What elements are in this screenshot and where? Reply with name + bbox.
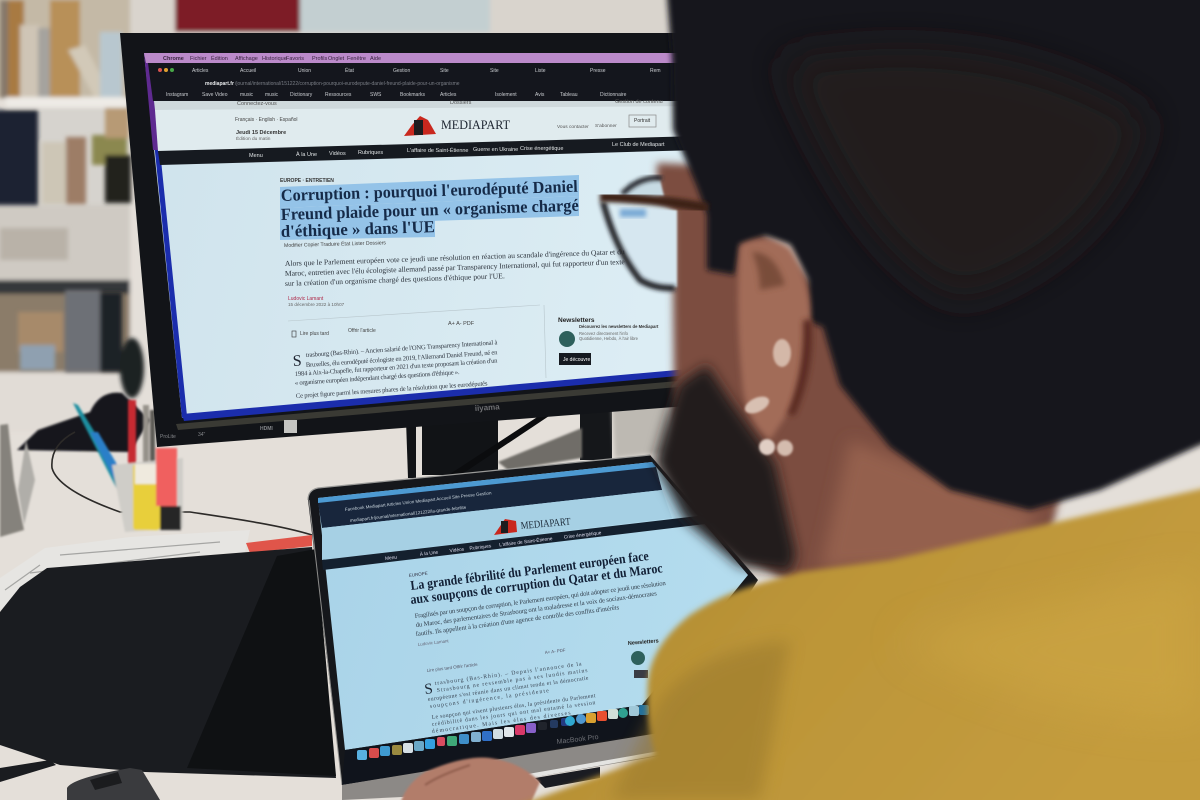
newsletters box <box>544 305 659 378</box>
device on desk <box>67 768 160 800</box>
monitor: Menu <box>249 153 263 159</box>
monitor stand <box>406 400 668 478</box>
beard <box>655 365 796 572</box>
monitor: Le Club de Mediapart <box>612 142 665 148</box>
monitor: Affichage <box>235 56 258 62</box>
site header: Jeudi 15 Décembre <box>236 130 286 136</box>
laptop body: S <box>424 681 434 698</box>
laptop headline: EUROPE <box>409 571 428 578</box>
monitor: Tableau <box>560 92 578 98</box>
monitor: SWS <box>370 92 382 98</box>
monitor foot labels: 34" <box>198 432 206 438</box>
article body: « organisme européen indépendant chargé des questions d'éthique ». <box>295 369 460 387</box>
monitor: Isolement <box>495 92 517 98</box>
laptop: Facebook Mediapart Articles Union Mediapart Accueil Site Presse Gestion <box>345 490 492 512</box>
monitor: music <box>265 92 279 98</box>
monitor: Gestion <box>393 68 410 74</box>
site top strip <box>154 101 700 110</box>
laptop base <box>342 732 665 800</box>
monitor: Chrome <box>163 56 184 62</box>
laptop body: Ludovic Lamant <box>418 638 450 647</box>
laptop logo <box>494 517 572 535</box>
ear <box>738 239 810 440</box>
article body: Bruxelles, élu eurodéputé écologiste en 2019, l'Allemand Daniel Freund, né en <box>306 349 498 369</box>
papers <box>0 530 250 610</box>
laptop lead: Fragilisés par un soupçon de corruption, le Parlement européen, qui doit adopter ce jeudi une résolution <box>414 580 667 620</box>
bookshelf and blurred objects <box>0 0 144 398</box>
byline and tools: A+ A- PDF <box>448 321 475 327</box>
article body <box>292 339 498 400</box>
monitor: Accueil <box>240 68 256 74</box>
monitor: Liste <box>535 68 546 74</box>
monitor: Guerre en Ukraine <box>473 147 518 153</box>
site header: Portrait <box>634 118 651 124</box>
site header: S'abonner <box>595 123 617 129</box>
article heading: Corruption : pourquoi l'eurodéputé Daniel <box>281 177 578 205</box>
laptop body: trasbourg (Bas-Rhin). – Depuis l'annonce de la <box>434 660 582 687</box>
laptop lower bezel with dock <box>342 705 665 785</box>
site header: Français · English · Español <box>235 117 298 123</box>
hair <box>665 0 1200 510</box>
monitor: Site <box>490 68 499 74</box>
pen cup <box>73 400 183 532</box>
Mediapart logo: MEDIAPART <box>441 117 510 132</box>
monitor: Articles <box>192 68 209 74</box>
byline and tools: Offrir l'article <box>348 328 376 334</box>
sweater <box>480 480 1200 800</box>
monitor <box>120 33 700 478</box>
monitor screen <box>144 53 700 418</box>
laptop screen <box>318 462 748 750</box>
monitor: Aide <box>370 56 381 62</box>
laptop browser bar <box>318 463 662 528</box>
article body: trasbourg (Bas-Rhin). – Ancien salarié de l'ONG Transparency International à <box>306 339 498 359</box>
article heading: Modifier Copier Traduire État Lister Dossiers <box>284 239 386 249</box>
monitor: Ressources <box>325 92 352 98</box>
newsletters box: Newsletters <box>558 317 595 324</box>
glasses <box>600 178 708 288</box>
laptop body: soupçons d'ingérence, la présidente <box>429 688 550 710</box>
site header <box>155 106 700 151</box>
neck and face skin <box>657 163 1060 590</box>
Mediapart logo <box>404 116 510 136</box>
article heading: Freund plaide pour un « organisme chargé <box>281 196 579 224</box>
monitor: Presse <box>590 68 606 74</box>
laptop: Rubriques <box>469 543 492 552</box>
monitor: Avis <box>535 92 545 98</box>
monitor: Dictionnaire <box>600 92 627 98</box>
monitor: État <box>345 67 355 74</box>
article lead: Alors que le Parlement européen vote ce jeudi une résolution en réaction au scandale d'ingérence du Qatar et du <box>285 247 625 268</box>
laptop headline: aux soupçons de corruption du Qatar et du Maroc <box>409 560 663 607</box>
monitor: Crise énergétique <box>520 146 563 152</box>
monitor: L'affaire de Saint-Étienne <box>407 147 468 154</box>
monitor: Favoris <box>286 56 304 62</box>
monitor: Historique <box>262 56 287 62</box>
monitor: Profils <box>312 56 328 62</box>
monitor: Instagram <box>166 92 188 98</box>
laptop body: démocratique. Mais les élus des diverses <box>431 710 572 735</box>
laptop body: Le soupçon qui visent plusieurs élus, la présidente du Parlement <box>431 693 596 721</box>
laptop header <box>322 490 672 560</box>
article body: 1984 à Aix-la-Chapelle, fut rapporteur en 2021 d'un texte proposant la création d'un <box>295 358 498 378</box>
frame <box>603 202 675 288</box>
article lead <box>285 247 625 288</box>
monitor: /journal/international/151222/corruption-pourquoi-eurodepute-daniel-freund-plaide-pour-un-organisme <box>235 81 460 87</box>
monitor: Articles <box>440 92 457 98</box>
monitor: Rem <box>650 68 661 74</box>
laptop body: européenne s'est réunie dans un climat tendu et la démocratie <box>427 676 589 703</box>
laptop newsletters <box>628 638 659 678</box>
monitor: Save Video <box>202 92 228 98</box>
laptop body: Strasbourg ne ressemble pas à ses lundis matins <box>436 668 589 694</box>
laptop: Vidéos <box>449 547 465 554</box>
laptop nav <box>322 514 722 570</box>
cables <box>52 432 312 535</box>
lens <box>616 205 677 288</box>
laptop: mediapart.fr/journal/international/121222/la-grande-febrilite <box>350 505 467 523</box>
monitor logo: iiyama <box>475 402 501 413</box>
byline and tools <box>288 296 540 337</box>
article lead: Maroc, entretien avec l'élu écologiste allemand passé par Transparency International, qui fut rapporteur d'un texte <box>285 257 625 278</box>
man <box>480 0 1200 800</box>
site header: Édition du matin <box>236 135 271 142</box>
monitor: Rubriques <box>358 150 383 156</box>
laptop: Menu <box>385 555 398 562</box>
laptop lead <box>414 580 667 638</box>
monitor: Connectez-vous <box>237 101 277 107</box>
laptop headline: La grande fébrilité du Parlement européen face <box>409 548 649 593</box>
newsletters box: Découvrez les newsletters de Mediapart <box>579 324 659 329</box>
monitor: Édition <box>211 55 228 62</box>
monitor: À la Une <box>296 151 317 158</box>
article heading <box>280 175 579 249</box>
earrings <box>742 339 793 456</box>
byline and tools: Lire plus tard <box>300 331 329 337</box>
black sleeve <box>0 547 336 778</box>
monitor: Dictionary <box>290 92 313 98</box>
laptop newsletters: Newsletters <box>628 638 659 647</box>
laptop: À la Une <box>419 549 439 558</box>
newsletters box: Je découvre <box>563 357 590 363</box>
monitor bezel <box>120 33 700 447</box>
article body: Ce projet figure parmi les mesures phares de la résolution que les eurodéputés <box>296 380 488 400</box>
laptop dock icons <box>357 705 649 760</box>
monitor foot labels: HDMI <box>260 426 273 432</box>
laptop lead: fautifs. Ils appellent à la création d'une agence de contrôle des conflits d'intérêts <box>415 604 620 638</box>
browser chrome <box>148 63 700 101</box>
monitor: music <box>240 92 254 98</box>
traffic lights <box>158 68 174 72</box>
byline and tools: 15 décembre 2022 à 10h07 <box>288 302 345 307</box>
article heading: d'éthique » dans l'UE <box>281 217 435 241</box>
site header: Vous contacter <box>557 124 589 130</box>
monitor: Site <box>440 68 449 74</box>
hand <box>400 758 540 800</box>
sweater shading <box>610 640 790 800</box>
laptop body: A+ A- PDF <box>545 647 566 655</box>
article heading: EUROPE · ENTRETIEN <box>280 178 334 184</box>
laptop body <box>418 638 596 735</box>
laptop bezel <box>308 455 758 785</box>
black object behind monitor <box>17 393 150 452</box>
monitor: Fenêtre <box>347 56 366 62</box>
monitor foot labels: ProLite <box>160 434 176 440</box>
monitor: Dossiers <box>450 100 472 106</box>
article lead: sur la création d'un organisme chargé des questions d'éthique pour l'UE. <box>285 271 505 288</box>
article body: S <box>292 353 302 370</box>
laptop body: crédibilité dans les jours qui ont mal entamé la session <box>431 700 596 728</box>
monitor foot labels <box>160 420 297 440</box>
monitor: Union <box>298 68 311 74</box>
site nav bar <box>158 136 700 165</box>
menu bar <box>144 53 700 63</box>
laptop: L'affaire de Saint-Étienne <box>499 535 553 548</box>
monitor: Gestion de contenu <box>615 99 663 105</box>
monitor: mediapart.fr <box>205 81 234 87</box>
metal holder <box>0 424 24 537</box>
byline and tools: Ludovic Lamant <box>288 296 324 302</box>
laptop <box>308 455 758 800</box>
MacBook Pro label: MacBook Pro <box>556 734 599 746</box>
monitor: Fichier <box>190 56 207 62</box>
laptop: Crise énergétique <box>563 530 602 541</box>
laptop lead: du Maroc, des parlementaires de Strasbourg ont la maladresse et la voix de sociaux-démocrates <box>415 590 658 629</box>
monitor: Bookmarks <box>400 92 426 98</box>
monitor: Onglet <box>328 56 345 62</box>
newsletters box: Quotidienne, Hebdo, À l'air libre <box>579 336 639 341</box>
desk surface objects <box>0 393 336 800</box>
newsletters box: Recevez directement l'info <box>579 331 629 336</box>
laptop logo: MEDIAPART <box>520 517 572 532</box>
laptop body: Lire plus tard Offrir l'article <box>427 662 478 673</box>
monitor: Vidéos <box>329 151 346 157</box>
